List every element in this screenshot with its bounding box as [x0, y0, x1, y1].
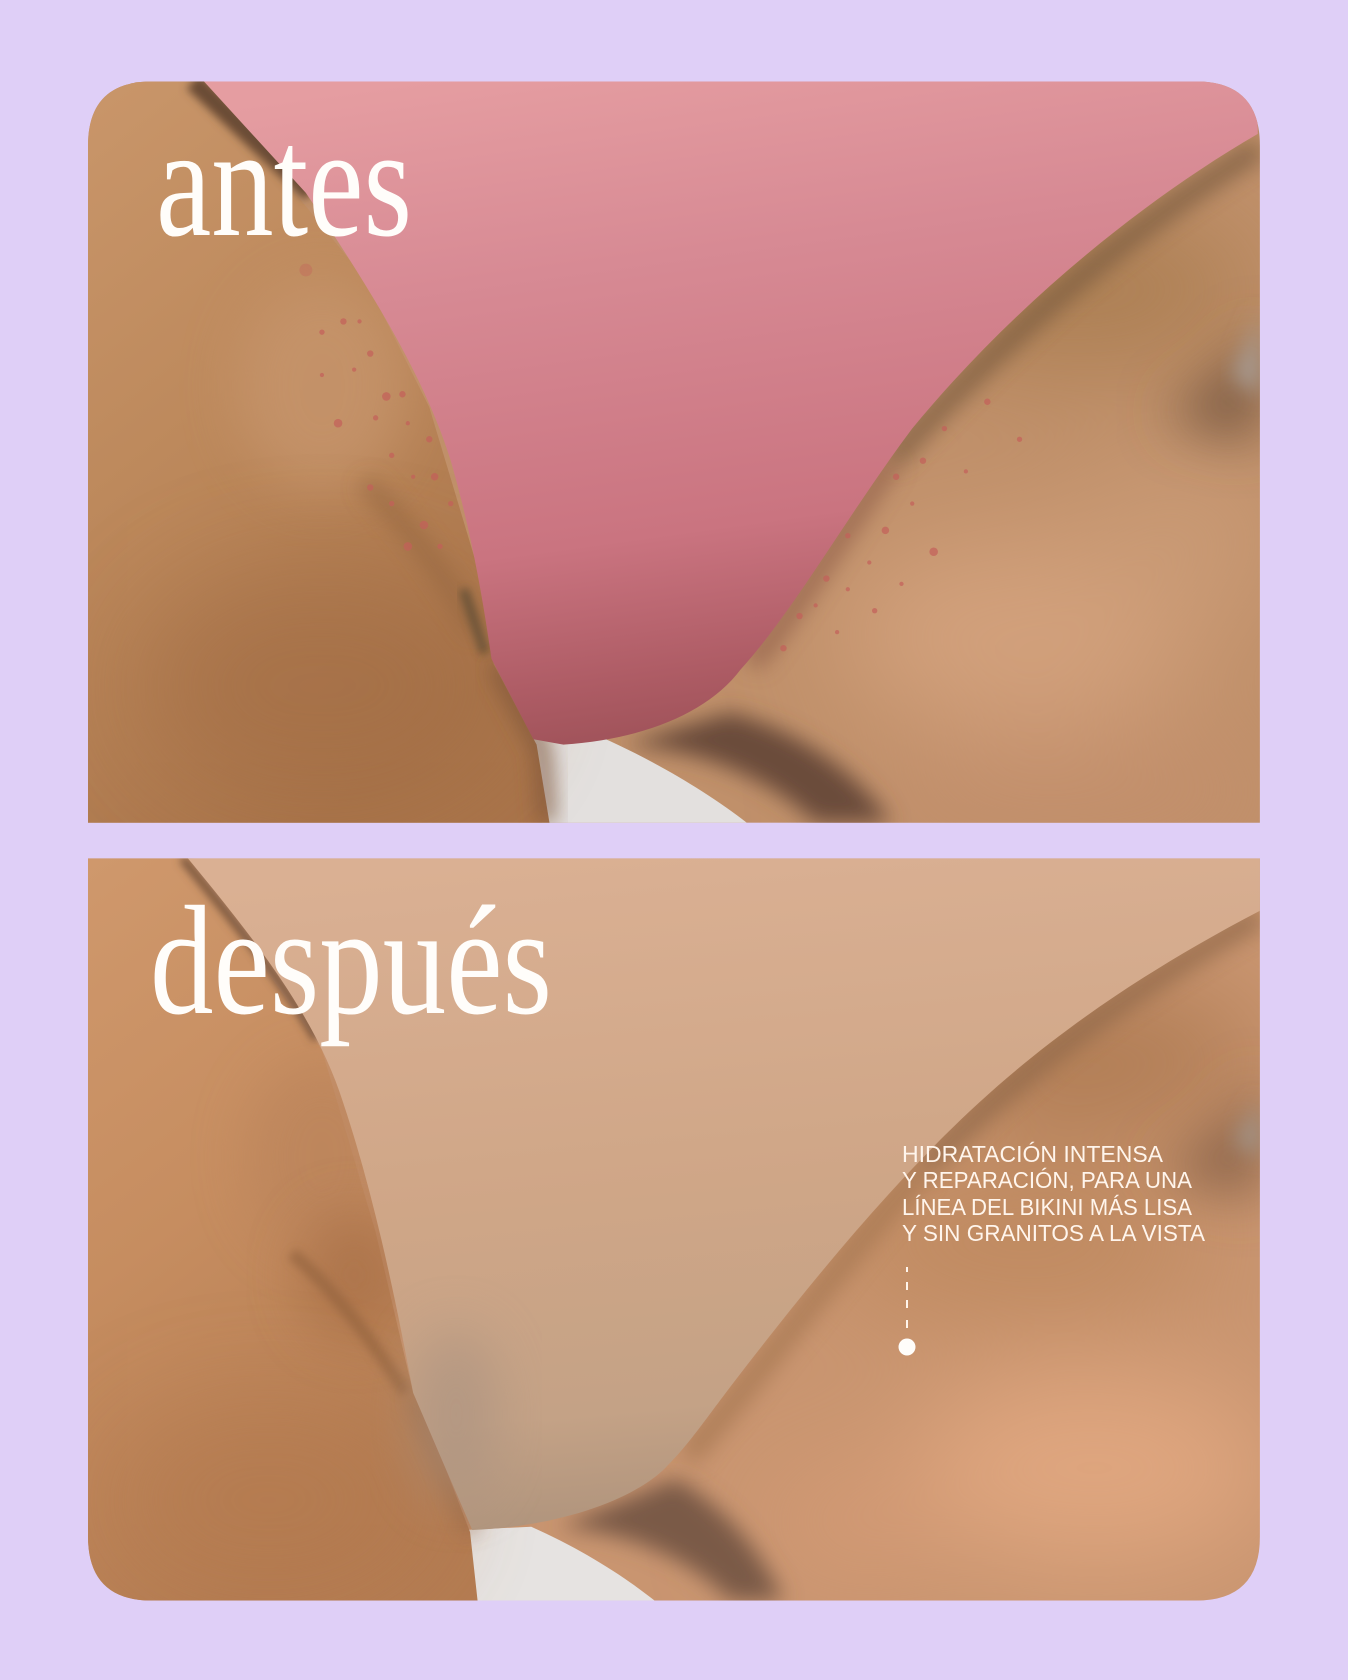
photo: después, beige swimwear and skin — [88, 858, 1277, 1601]
panel: antes — [88, 81, 1288, 857]
background gap — [464, 1527, 655, 1601]
heading: después: después — [150, 874, 552, 1047]
background gap — [531, 737, 747, 823]
caption — [902, 1141, 1205, 1246]
caption: HIDRATACIÓN INTENSA — [902, 1141, 1163, 1167]
left thigh — [88, 858, 478, 1601]
photo: antes, pink swimwear and skin — [88, 81, 1288, 857]
shadow under thigh — [558, 1479, 783, 1601]
caption: LÍNEA DEL BIKINI MÁS LISA — [902, 1194, 1192, 1220]
red spots — [299, 264, 1022, 651]
cloth edge shadows — [193, 81, 311, 193]
callout marker: dashed line and dot — [898, 1267, 916, 1356]
cloth edge shadows — [182, 858, 317, 1039]
heading: antes: antes — [156, 95, 412, 270]
caption: Y REPARACIÓN, PARA UNA — [902, 1167, 1192, 1193]
panel: después — [88, 858, 1277, 1601]
shadow under thigh — [622, 712, 891, 823]
caption: Y SIN GRANITOS A LA VISTA — [902, 1220, 1205, 1246]
left thigh — [88, 81, 549, 823]
pink cloth — [204, 81, 1258, 745]
beige cloth — [188, 858, 1260, 1530]
